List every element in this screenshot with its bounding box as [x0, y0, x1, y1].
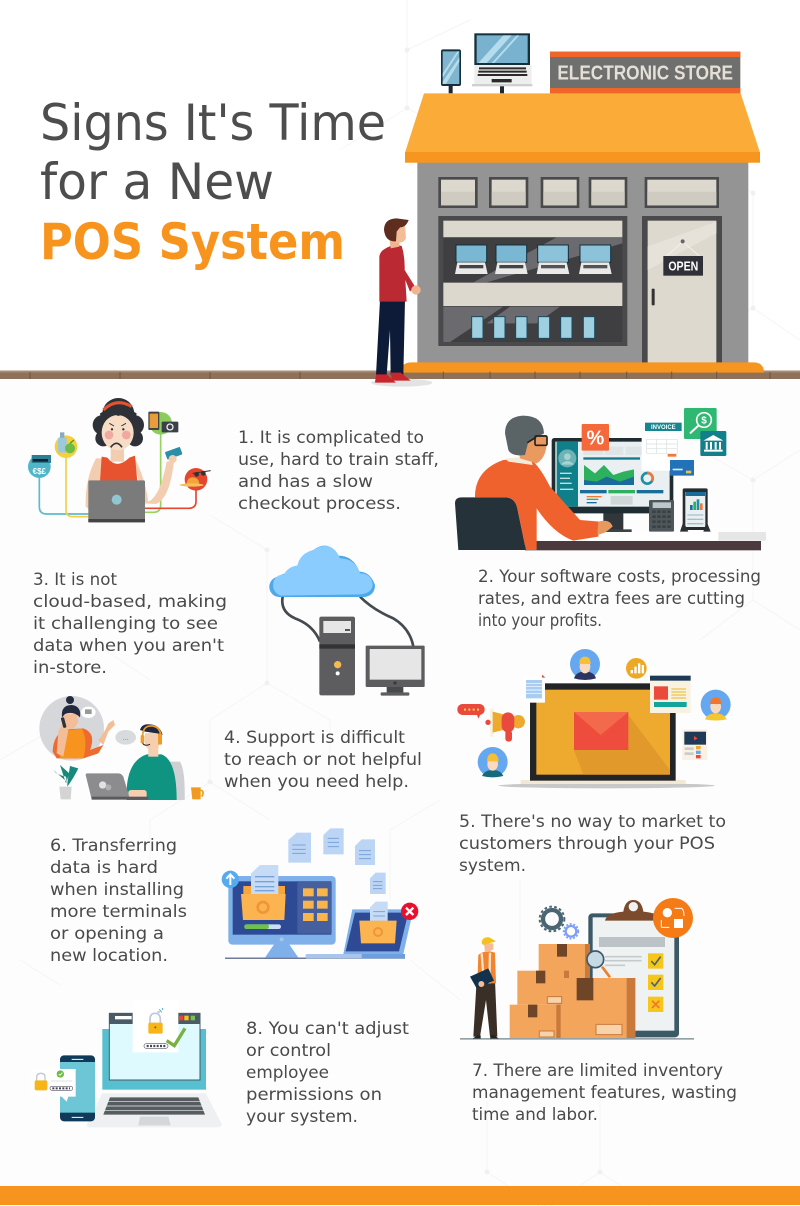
ground strip [0, 370, 800, 379]
person [371, 218, 432, 387]
text: item 2: into your profits. [478, 611, 602, 631]
illustration: data transfer between computers [222, 828, 418, 959]
upload badge [222, 871, 239, 888]
text: item 2: 2. Your software costs, processing [478, 567, 761, 587]
floating documents [288, 828, 386, 894]
smartphone [680, 488, 711, 532]
text: item 5: system. [459, 856, 526, 876]
laptop [521, 683, 686, 784]
title: for a New [40, 153, 274, 211]
bank badge [700, 431, 726, 456]
icon: money [28, 455, 51, 478]
smartphone [60, 1055, 95, 1121]
credit card [165, 447, 183, 463]
browser window [109, 1013, 200, 1080]
text: item 1: and has a slow [238, 472, 373, 492]
clipboard [588, 900, 679, 1037]
text: item 4: 4. Support is difficult [224, 728, 405, 748]
text: item 2: rates, and extra fees are cutting [478, 589, 745, 609]
open sign [663, 239, 703, 276]
donut chart [642, 473, 653, 484]
process badge [653, 898, 693, 938]
man [475, 416, 613, 550]
upper windows [440, 178, 718, 207]
text: item 1: checkout process. [238, 494, 401, 514]
invoice [642, 423, 682, 471]
illustration: man reviewing costs at computer [455, 408, 766, 550]
text: item 4: when you need help. [224, 772, 409, 792]
store sign [550, 52, 740, 93]
text: item 8: or control [246, 1041, 331, 1061]
woman [86, 398, 174, 512]
desk [525, 532, 766, 550]
error badge [401, 903, 418, 920]
illustration: customer calling support agent [39, 696, 203, 800]
search money badge: $ [701, 416, 707, 427]
bubble: complaint [81, 707, 96, 718]
text: item 1 [238, 428, 439, 514]
text: item 4: to reach or not helpful [224, 750, 422, 770]
footer bar [0, 1186, 800, 1205]
login card [133, 1000, 185, 1052]
text: item 3: in-store. [33, 658, 107, 678]
display window [438, 216, 627, 346]
text: item 3: data when you aren't [33, 636, 224, 656]
text: item 7: management features, wasting [472, 1083, 737, 1103]
text: item 8 [246, 1019, 409, 1127]
text: item 4 [224, 728, 422, 792]
text: item 7 [472, 1061, 737, 1125]
rooftop phone [441, 49, 461, 93]
text: item 8: your system. [246, 1107, 358, 1127]
text: item 3 [33, 570, 227, 678]
small folder with document [359, 902, 397, 943]
text: item 6: data is hard [50, 858, 158, 878]
text: item 7: time and labor. [472, 1105, 598, 1125]
text: item 6 [50, 836, 187, 966]
rooftop laptop [472, 33, 532, 93]
folder with document [241, 865, 286, 920]
icon: money: €$£ [33, 467, 47, 476]
illustration: secure laptop and phone login [32, 1000, 222, 1127]
text: item 5: customers through your POS [459, 834, 715, 854]
speech circle [39, 696, 104, 761]
stacked boxes [510, 944, 635, 1038]
invoice: INVOICE [651, 425, 676, 431]
chair [170, 762, 185, 800]
title [40, 94, 386, 271]
store sign: ELECTRONIC STORE [557, 62, 733, 84]
text: item 3: cloud-based, making [33, 592, 227, 612]
potted plant [53, 765, 78, 799]
illustration: frustrated shopper with laptop [28, 398, 211, 522]
door [642, 216, 722, 363]
text: item 1: 1. It is complicated to [238, 428, 424, 448]
laptop [87, 1029, 222, 1127]
document [524, 675, 545, 703]
text: item 8: permissions on [246, 1085, 382, 1105]
connecting wires [39, 433, 196, 517]
bubble: agent: ... [123, 733, 129, 742]
text: item 5 [459, 812, 726, 876]
computer tower [319, 617, 355, 695]
avatar: right [701, 690, 731, 720]
text: item 2 [478, 567, 761, 631]
illustration: inventory boxes and clipboard [460, 898, 694, 1040]
store base [401, 362, 764, 373]
floor line [460, 1038, 694, 1040]
text: item 3: 3. It is not [33, 570, 117, 590]
cables [282, 597, 413, 647]
store wall [417, 162, 748, 363]
icon: electronics [148, 412, 178, 435]
percent badge: % [586, 428, 604, 450]
shadow [498, 783, 715, 788]
awning [405, 93, 760, 163]
icon: groceries [55, 432, 77, 458]
percent badge [582, 424, 609, 451]
search money badge [684, 408, 717, 439]
desktop monitor [228, 876, 336, 958]
video panel [682, 729, 707, 760]
woman on phone [53, 696, 115, 758]
illustration: electronic store [371, 33, 764, 387]
web page panel [650, 676, 691, 713]
laptop [88, 480, 145, 522]
title: Signs It's Time [40, 94, 386, 152]
speech bubble [457, 704, 485, 719]
phone login bubble [32, 1069, 76, 1102]
avatar: left [478, 747, 508, 777]
icon: fashion [180, 468, 211, 491]
credit card [670, 460, 694, 476]
desk line [225, 958, 405, 959]
cloud [269, 546, 375, 597]
chart badge [626, 658, 647, 679]
bubble: agent [115, 730, 136, 745]
text: item 6: new location. [50, 946, 168, 966]
text: item 1: use, hard to train staff, [238, 450, 439, 470]
text: item 8: 8. You can't adjust [246, 1019, 409, 1039]
calculator [649, 500, 674, 532]
envelope [574, 712, 628, 750]
support agent [127, 724, 177, 800]
gear icons [540, 907, 578, 939]
text: item 7: 7. There are limited inventory [472, 1061, 723, 1081]
phones on display [472, 317, 595, 338]
open sign: OPEN [668, 260, 698, 274]
text: item 3: it challenging to see [33, 614, 218, 634]
area chart [584, 465, 634, 484]
illustration: email marketing laptop [457, 649, 731, 788]
illustration: cloud connected to computer [269, 546, 425, 696]
text: item 8: employee [246, 1063, 329, 1083]
text: item 6: when installing [50, 880, 184, 900]
text: item 6: or opening a [50, 924, 164, 944]
magnifying glass [587, 951, 610, 977]
mug [191, 787, 203, 799]
worker [470, 937, 499, 1039]
text: item 6: 6. Transferring [50, 836, 177, 856]
monitor [552, 438, 673, 532]
text: item 5: 5. There's no way to market to [459, 812, 726, 832]
megaphone [485, 708, 525, 742]
text: item 6: more terminals [50, 902, 187, 922]
laptops on display [455, 245, 612, 274]
title: POS System [40, 213, 345, 271]
laptop [86, 773, 148, 800]
laptop [306, 909, 413, 958]
chair [455, 497, 526, 550]
monitor [366, 646, 425, 696]
avatar: top [570, 649, 600, 680]
